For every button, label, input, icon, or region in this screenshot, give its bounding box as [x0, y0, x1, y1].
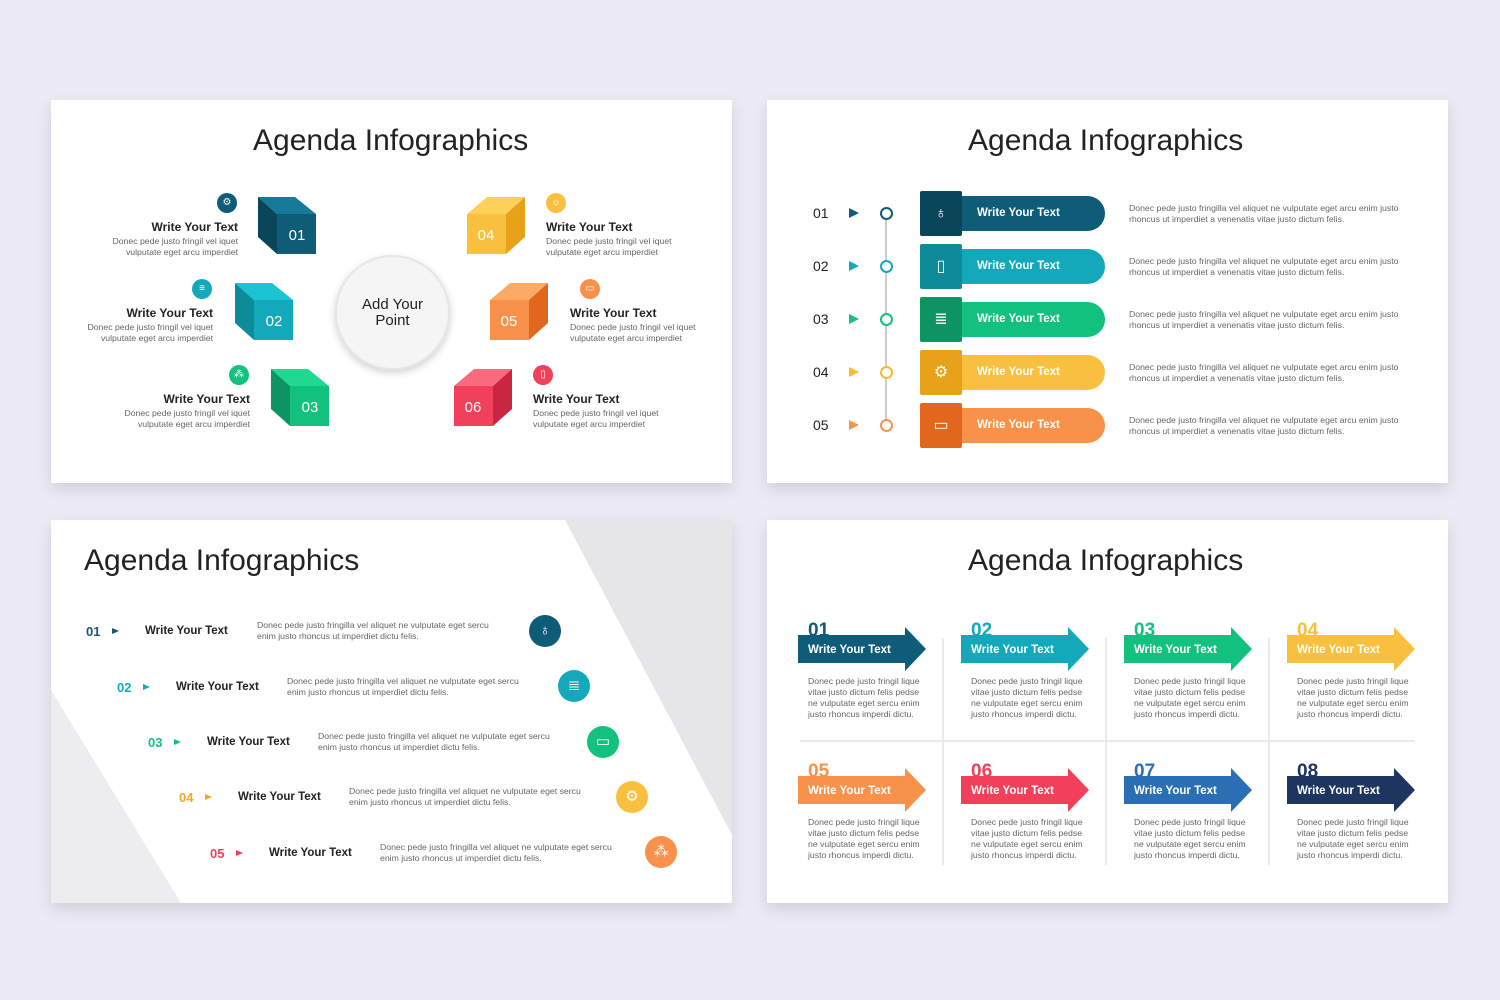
- descriptions row 2: ne vulputate eget sercu enim: [808, 839, 920, 849]
- row 04: [179, 781, 648, 813]
- row 03: Write Your Text: [977, 313, 1060, 325]
- row 03: [148, 726, 619, 758]
- row 03: Donec pede justo fringilla vel aliquet ne vulputate eget sercu: [318, 731, 550, 741]
- panel: bottom-right arrows grid: vitae justo dictum felis pedse: [971, 687, 1082, 697]
- row 03: rhoncus ut imperdiet a venenatis vitae justo dictum felis.: [1129, 320, 1344, 330]
- arrow 07: 07: [1134, 761, 1155, 782]
- item 03: vulputate eget arcu imperdiet: [138, 419, 250, 429]
- row 05: [210, 836, 677, 868]
- cube 06: 06: [465, 399, 481, 416]
- row 01: 01: [86, 624, 100, 639]
- row 04: ⚙: [934, 364, 948, 381]
- cube 05: 05: [501, 313, 517, 330]
- row 01: [86, 615, 561, 647]
- row 05: Donec pede justo fringilla vel aliquet ne vulputate eget arcu enim justo: [1129, 415, 1398, 425]
- row 03: Write Your Text: [207, 736, 290, 748]
- row 01: ♁: [539, 622, 551, 639]
- panel: bottom-right arrows grid: vitae justo dictum felis pedse: [1297, 828, 1408, 838]
- arrow 08: [1287, 761, 1415, 812]
- row 02: Write Your Text: [977, 260, 1060, 272]
- row 02: [117, 670, 590, 702]
- arrow 05: 05: [808, 761, 830, 782]
- arrow 03: [1124, 620, 1252, 671]
- row 05: Write Your Text: [269, 847, 352, 859]
- arrow 05: Write Your Text: [808, 785, 891, 797]
- row 02: Donec pede justo fringilla vel aliquet ne vulputate eget arcu enim justo: [1129, 256, 1398, 266]
- descriptions row 2: vitae justo dictum felis pedse: [808, 828, 919, 838]
- cube 06: [454, 369, 512, 426]
- panel: bottom-right arrows grid: Donec pede justo fringil lique: [1134, 817, 1246, 827]
- row 04: Write Your Text: [238, 791, 321, 803]
- row 02: enim justo rhoncus ut imperdiet dictu felis.: [287, 687, 449, 697]
- title: Agenda Infographics: [968, 124, 1243, 157]
- arrow 01: [798, 620, 926, 671]
- row 04: Donec pede justo fringilla vel aliquet ne vulputate eget sercu: [349, 786, 581, 796]
- item 06: [533, 365, 659, 429]
- row 01: 01: [813, 205, 829, 221]
- panel: bottom-right arrows grid: justo rhoncus imperdi dictu.: [1134, 850, 1240, 860]
- cube 02: [235, 283, 293, 340]
- row 01: Donec pede justo fringilla vel aliquet ne vulputate eget arcu enim justo: [1129, 203, 1398, 213]
- panel: bottom-right arrows grid: vitae justo dictum felis pedse: [1134, 687, 1245, 697]
- row 04: Donec pede justo fringilla vel aliquet ne vulputate eget arcu enim justo: [1129, 362, 1398, 372]
- item 01: ⚙: [223, 197, 231, 208]
- grey diagonal shapes: [51, 520, 732, 903]
- row 01: rhoncus ut imperdiet a venenatis vitae justo dictum felis.: [1129, 214, 1344, 224]
- descriptions row 1: [808, 676, 920, 719]
- item 03: Donec pede justo fringil vel iquet: [124, 408, 250, 418]
- cube 01: 01: [289, 227, 305, 244]
- row 02: 02: [813, 258, 829, 274]
- arrow 04: Write Your Text: [1297, 644, 1380, 656]
- row 02: 02: [117, 680, 131, 695]
- item 04: Write Your Text: [546, 220, 632, 234]
- row 02: Write Your Text: [176, 681, 259, 693]
- center circle: Point: [375, 312, 410, 329]
- row 03: 03: [813, 311, 829, 327]
- row 04: [813, 350, 1398, 395]
- item 06: Write Your Text: [533, 392, 619, 406]
- cube 02: 02: [266, 313, 282, 330]
- arrow 03: Write Your Text: [1134, 644, 1217, 656]
- arrow 07: [1124, 761, 1252, 812]
- descriptions row 2: [808, 817, 920, 860]
- panel: bottom-right arrows grid: justo rhoncus imperdi dictu.: [971, 709, 1077, 719]
- row 01: [813, 191, 1398, 236]
- item 05: Donec pede justo fringil vel iquet: [570, 322, 696, 332]
- row 04: 04: [813, 364, 829, 380]
- panel: bottom-right arrows grid: vitae justo dictum felis pedse: [1297, 687, 1408, 697]
- panel: bottom-right arrows grid: ne vulputate eget sercu enim: [1134, 698, 1246, 708]
- item 01: Write Your Text: [152, 220, 238, 234]
- arrow 02: Write Your Text: [971, 644, 1054, 656]
- row 04: Write Your Text: [977, 366, 1060, 378]
- arrow 02: [961, 620, 1089, 671]
- item 05: [570, 279, 696, 343]
- row 05: ▭: [933, 417, 949, 434]
- item 01: vulputate eget arcu imperdiet: [126, 247, 238, 257]
- row 01: Donec pede justo fringilla vel aliquet ne vulputate eget sercu: [257, 620, 489, 630]
- panel: bottom-right arrows grid: justo rhoncus imperdi dictu.: [971, 850, 1077, 860]
- row 05: enim justo rhoncus ut imperdiet dictu felis.: [380, 853, 542, 863]
- panel: bottom-right arrows grid: ne vulputate eget sercu enim: [1297, 839, 1409, 849]
- row 03: ▭: [596, 733, 610, 750]
- arrow 03: 03: [1134, 620, 1155, 641]
- arrow 07: Write Your Text: [1134, 785, 1217, 797]
- panel: bottom-right arrows grid: Donec pede justo fringil lique: [1134, 676, 1246, 686]
- row 02: Donec pede justo fringilla vel aliquet ne vulputate eget sercu: [287, 676, 519, 686]
- cube 03: 03: [302, 399, 318, 416]
- arrow 04: 04: [1297, 620, 1319, 641]
- row 02: [813, 244, 1398, 289]
- row 05: ⁂: [654, 843, 668, 860]
- arrow 02: 02: [971, 620, 992, 641]
- title: Agenda Infographics: [968, 544, 1243, 577]
- panel: bottom-right arrows grid: justo rhoncus imperdi dictu.: [1297, 850, 1403, 860]
- descriptions row 1: ne vulputate eget sercu enim: [808, 698, 920, 708]
- descriptions row 1: vitae justo dictum felis pedse: [808, 687, 919, 697]
- item 04: ☼: [551, 197, 561, 208]
- center circle: [335, 255, 450, 370]
- panel: bottom-right arrows grid: Donec pede justo fringil lique: [971, 676, 1083, 686]
- item 01: Donec pede justo fringil vel iquet: [112, 236, 238, 246]
- panel: bottom-right arrows grid: [767, 520, 1448, 903]
- arrow 08: Write Your Text: [1297, 785, 1380, 797]
- item 06: ▯: [540, 369, 546, 380]
- row 05: 05: [210, 846, 224, 861]
- title: Agenda Infographics: [84, 544, 359, 577]
- panel: bottom-right arrows grid: justo rhoncus imperdi dictu.: [1297, 709, 1403, 719]
- row 03: 03: [148, 735, 162, 750]
- row 05: 05: [813, 417, 829, 433]
- item 02: vulputate eget arcu imperdiet: [101, 333, 213, 343]
- row 03: ≣: [934, 311, 948, 328]
- row 02: rhoncus ut imperdiet a venenatis vitae justo dictum felis.: [1129, 267, 1344, 277]
- item 01: [112, 193, 238, 257]
- item 02: Donec pede justo fringil vel iquet: [87, 322, 213, 332]
- panel: bottom-right arrows grid: Donec pede justo fringil lique: [1297, 676, 1409, 686]
- arrows: [798, 620, 1415, 812]
- panel: bottom-right arrows grid: ne vulputate eget sercu enim: [971, 839, 1083, 849]
- arrow 05: [798, 761, 926, 812]
- panel: bottom-right arrows grid: Donec pede justo fringil lique: [971, 817, 1083, 827]
- panel: top-left cubes: [51, 100, 732, 483]
- title: Agenda Infographics: [253, 124, 528, 157]
- panel: bottom-right arrows grid: Donec pede justo fringil lique: [1297, 817, 1409, 827]
- center circle: Add Your: [362, 296, 423, 313]
- arrow 01: 01: [808, 620, 830, 641]
- panel: bottom-right arrows grid: justo rhoncus imperdi dictu.: [1134, 709, 1240, 719]
- panel: top-right timeline: [767, 100, 1448, 483]
- panel: bottom-right arrows grid: ne vulputate eget sercu enim: [1297, 698, 1409, 708]
- cube 01: [258, 197, 316, 254]
- item 03: ⁂: [234, 369, 244, 380]
- item 02: [87, 279, 213, 343]
- item 04: [546, 193, 672, 257]
- descriptions row 1: justo rhoncus imperdi dictu.: [808, 709, 914, 719]
- row 05: Write Your Text: [977, 419, 1060, 431]
- row 05: [813, 403, 1398, 448]
- descriptions row 2: justo rhoncus imperdi dictu.: [808, 850, 914, 860]
- arrow 04: [1287, 620, 1415, 671]
- panel: bottom-right arrows grid: ne vulputate eget sercu enim: [1134, 839, 1246, 849]
- descriptions row 1: Donec pede justo fringil lique: [808, 676, 920, 686]
- row 01: Write Your Text: [145, 625, 228, 637]
- item 03: Write Your Text: [164, 392, 250, 406]
- arrow 06: Write Your Text: [971, 785, 1054, 797]
- item 05: vulputate eget arcu imperdiet: [570, 333, 682, 343]
- arrow 06: 06: [971, 761, 992, 782]
- cube 03: [271, 369, 329, 426]
- row 03: enim justo rhoncus ut imperdiet dictu felis.: [318, 742, 480, 752]
- row 02: ≣: [568, 677, 580, 694]
- timeline line: [885, 213, 887, 426]
- row 05: rhoncus ut imperdiet a venenatis vitae justo dictum felis.: [1129, 426, 1344, 436]
- cube 04: [467, 197, 525, 254]
- row 04: rhoncus ut imperdiet a venenatis vitae justo dictum felis.: [1129, 373, 1344, 383]
- item 02: Write Your Text: [127, 306, 213, 320]
- item 03: [124, 365, 250, 429]
- panel: bottom-left diagonal list: [51, 520, 732, 903]
- item 05: ▭: [585, 283, 595, 294]
- item 05: Write Your Text: [570, 306, 656, 320]
- arrow 08: 08: [1297, 761, 1318, 782]
- row 01: ♁: [935, 205, 947, 222]
- item 04: vulputate eget arcu imperdiet: [546, 247, 658, 257]
- cubes graphic: [235, 197, 548, 426]
- row 03: [813, 297, 1398, 342]
- cube 05: [490, 283, 548, 340]
- cube 04: 04: [478, 227, 494, 244]
- row 03: Donec pede justo fringilla vel aliquet ne vulputate eget arcu enim justo: [1129, 309, 1398, 319]
- grid dividers: [800, 638, 1415, 865]
- row 01: Write Your Text: [977, 207, 1060, 219]
- row 04: enim justo rhoncus ut imperdiet dictu felis.: [349, 797, 511, 807]
- row 01: enim justo rhoncus ut imperdiet dictu felis.: [257, 631, 419, 641]
- panel: bottom-right arrows grid: vitae justo dictum felis pedse: [1134, 828, 1245, 838]
- panel: bottom-right arrows grid: vitae justo dictum felis pedse: [971, 828, 1082, 838]
- arrow 06: [961, 761, 1089, 812]
- item 04: Donec pede justo fringil vel iquet: [546, 236, 672, 246]
- row 04: 04: [179, 790, 193, 805]
- row 05: Donec pede justo fringilla vel aliquet ne vulputate eget sercu: [380, 842, 612, 852]
- row 04: ⚙: [625, 788, 639, 805]
- descriptions row 2: Donec pede justo fringil lique: [808, 817, 920, 827]
- row 02: ▯: [937, 258, 945, 275]
- item 06: vulputate eget arcu imperdiet: [533, 419, 645, 429]
- arrow 01: Write Your Text: [808, 644, 891, 656]
- item 06: Donec pede justo fringil vel iquet: [533, 408, 659, 418]
- panel: bottom-right arrows grid: ne vulputate eget sercu enim: [971, 698, 1083, 708]
- item 02: ≡: [199, 283, 205, 294]
